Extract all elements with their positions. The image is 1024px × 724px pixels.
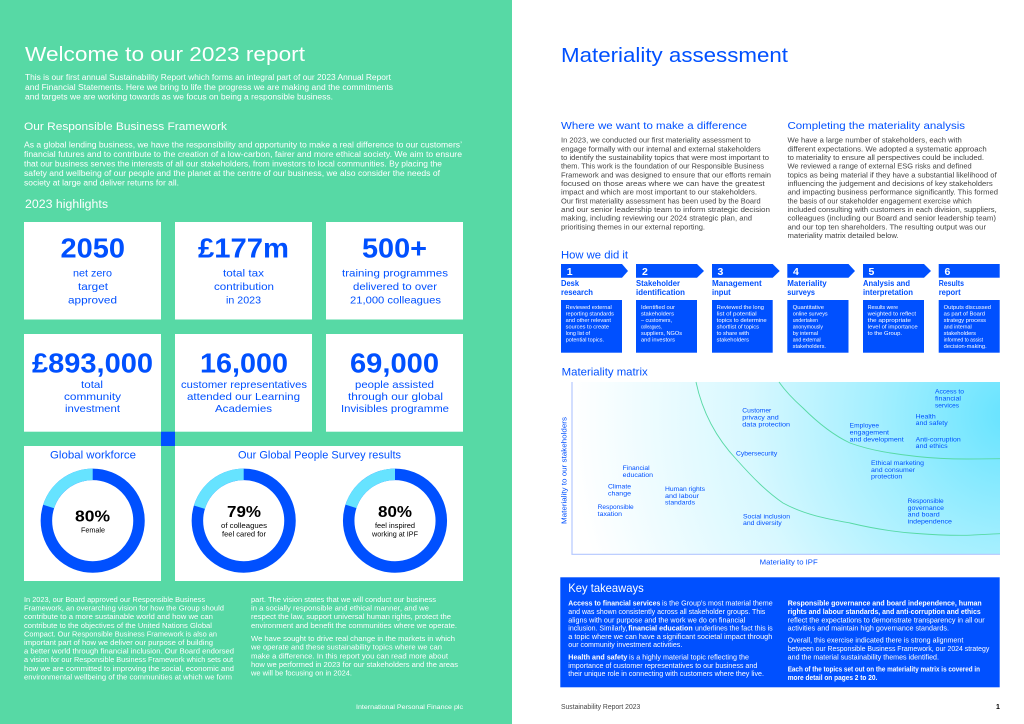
text block: takeaways right: reflect the expectations to demonstrate transparency in all our <box>788 617 985 624</box>
matrix labels: high materiality: services <box>935 403 960 410</box>
step 4: materiality surveys: undertaken <box>793 318 818 324</box>
matrix labels: medium materiality: data protection <box>742 421 790 428</box>
matrix labels: lower materiality <box>598 465 706 518</box>
text block: where we want to make a difference <box>561 138 771 231</box>
text block: completing the materiality analysis <box>788 138 998 240</box>
matrix labels: medium materiality: protection <box>871 474 903 481</box>
step 4: materiality surveys: stakeholders. <box>793 344 826 350</box>
panel: right white page <box>512 0 1024 724</box>
text block: takeaways right: Each of the topics set out on the materiality matrix is covered in <box>788 667 980 674</box>
card: total tax contribution: £177m <box>198 233 289 264</box>
step 6: results report: Results <box>939 279 964 288</box>
text block: where we want to make a difference: making, including reviewing our 2024 strategic plan, and <box>561 216 752 223</box>
matrix labels: medium materiality: and diversity <box>743 520 782 527</box>
text block: completing the materiality analysis: influencing the judgement and decisions of key stakeholders <box>788 181 993 188</box>
card: 2050 net zero target: target <box>78 281 108 293</box>
donut: 80% feel inspired: feel inspired <box>375 523 415 530</box>
step 1: desk research <box>561 264 628 353</box>
step 4: materiality surveys: Quantitative <box>793 305 824 311</box>
text block: takeaways left: Health and safety <box>568 654 627 662</box>
text block: takeaways left: their unique role in connecting with customers where they live. <box>568 671 764 678</box>
step 4: materiality surveys: by internal <box>793 331 818 337</box>
text block: framework description: safety and wellbeing of our people and the planet at the centre of our business, we also consider the needs of <box>24 169 441 178</box>
matrix labels: medium materiality: and consumer <box>871 467 916 474</box>
panel: global workforce <box>24 446 161 581</box>
step 1: desk research: sources to create <box>566 324 609 330</box>
heading: key takeaways: Key takeaways <box>568 581 644 595</box>
chart: materiality matrix <box>561 382 1000 567</box>
curve: upper materiality threshold <box>779 382 1000 459</box>
matrix labels: lower materiality: change <box>608 490 631 498</box>
text block: board approval column 1: contribute to a more sustainable world and how we can <box>24 614 213 621</box>
text block: board approval column 2: respect the law, support universal human rights, protect the <box>251 614 451 621</box>
matrix labels: lower materiality: taxation <box>598 511 622 518</box>
matrix labels: lower materiality: standards <box>665 500 696 507</box>
text block: board approval column 2 <box>250 597 459 678</box>
step 6: results report <box>939 264 1000 353</box>
card: 2050 net zero target: 2050 <box>60 233 125 264</box>
text block: takeaways left: importance of customer representatives to our business and <box>568 663 757 670</box>
text block: takeaways right <box>788 601 990 682</box>
text block: board approval column 1: Framework, an overarching vision for how the Group should <box>24 606 224 613</box>
step 3: management input: shortlist of topics <box>717 324 759 330</box>
step 3: management input: input <box>712 288 731 297</box>
text block: takeaways left: inclusion. Similarly, <box>568 626 627 633</box>
step 1: desk research: reporting standards <box>566 312 614 318</box>
text block: introduction: and targets we are working towards as we focus on being a responsible business. <box>25 93 333 102</box>
text block: framework description: society at large and deliver returns for all. <box>24 178 179 188</box>
panel: global workforce: Global workforce <box>50 450 136 462</box>
matrix labels: high materiality: and safety <box>916 420 948 427</box>
text block: introduction <box>25 73 393 102</box>
donut: 79% feel cared for <box>197 474 290 567</box>
donut: 80% feel inspired: 80% <box>378 504 412 521</box>
text block: takeaways left: financial education <box>628 626 693 633</box>
step 4: materiality surveys: online surveys <box>793 312 828 318</box>
footer: company name: International Personal Finance plc <box>356 704 464 711</box>
heading: how we did it: How we did it <box>561 249 628 261</box>
text block: where we want to make a difference: and our senior leadership team to inform strategic decision <box>561 207 770 214</box>
heading: where we want to make a difference: Where we want to make a difference <box>561 120 747 132</box>
curve: lower materiality threshold <box>696 382 1000 535</box>
step 6: results report: informed to assist <box>944 337 983 343</box>
matrix labels: high materiality <box>850 389 964 450</box>
matrix labels: medium materiality: Social inclusion <box>743 513 790 520</box>
matrix labels: medium materiality: and board <box>908 512 940 519</box>
step 5: analysis and interpretation <box>863 264 931 353</box>
donut: 80% female: 80% <box>75 509 110 526</box>
matrix labels: high materiality: and ethics <box>916 443 948 450</box>
step 1: desk research: research <box>561 288 593 297</box>
card: customer representatives: customer representatives <box>181 379 307 391</box>
text block: completing the materiality analysis: topics as being material if they have a substantial likelihood of <box>788 172 997 179</box>
matrix labels: high materiality: Health <box>916 413 936 420</box>
text block: where we want to make a difference: impact and which are most important to our stakeholders. <box>561 190 757 197</box>
step 5: analysis and interpretation: Results were <box>868 305 898 311</box>
text block: board approval column 1: environmental wellbeing of the communities at which we form <box>24 674 232 681</box>
card: 2050 net zero target <box>24 222 161 320</box>
decorative blue square <box>161 432 175 446</box>
matrix labels: high materiality: and development <box>850 436 904 443</box>
card: training programmes <box>326 222 463 320</box>
text block: takeaways right: more detail on pages 2 to 20. <box>788 675 877 682</box>
matrix labels: high materiality: Anti-corruption <box>916 436 961 443</box>
text block: completing the materiality analysis: colleagues (including our Board and senior leadership team) <box>788 216 996 223</box>
text block: board approval column 2: we operate and these sustainability topics where we can <box>250 645 442 652</box>
text block: introduction: This is our first annual Sustainability Report which forms an integral part of our 2023 Annual Report <box>25 73 392 82</box>
matrix labels: lower materiality: Responsible <box>598 504 634 511</box>
text block: completing the materiality analysis: different expectations. We adopted a systematic approach <box>788 146 987 153</box>
text block: where we want to make a difference: to identify the sustainability topics that were most important to <box>561 155 769 162</box>
step 2: stakeholder identification: 2 <box>642 266 648 278</box>
step 6: results report: decision-making. <box>944 344 987 350</box>
matrix labels: lower materiality: education <box>623 472 653 479</box>
step 5: analysis and interpretation: the appropriate <box>868 318 911 324</box>
step 3: management input: list of potential <box>717 312 757 318</box>
step 1: desk research: Desk <box>561 279 580 288</box>
text block: where we want to make a difference: prioritising themes in our external reporting. <box>561 224 705 231</box>
step 4: materiality surveys: and external <box>793 337 821 343</box>
card: customer representatives: 16,000 <box>200 348 288 379</box>
step 6: results report: 6 <box>944 266 950 278</box>
step 1: desk research: long list of <box>566 331 590 337</box>
card: people assisted: through our global <box>348 391 443 403</box>
step 2: stakeholder identification: and investors <box>641 337 675 343</box>
text block: where we want to make a difference: In 2023, we conducted our first materiality assessment to <box>561 138 751 145</box>
card: people assisted: people assisted <box>355 379 434 391</box>
heading: responsible business framework: Our Responsible Business Framework <box>24 121 228 133</box>
text block: takeaways right: Overall, this exercise indicated there is strong alignment <box>788 638 963 645</box>
card: training programmes: delivered to over <box>353 281 438 293</box>
card: people assisted: 69,000 <box>350 348 439 379</box>
text block: takeaways right: activities and maintain high governance standards. <box>788 626 949 633</box>
step 2: stakeholder identification: – customers, <box>641 318 672 324</box>
text block: completing the materiality analysis: included consulting with customers in each division, suppliers, <box>788 207 997 214</box>
step 6: results report: Outputs discussed <box>944 305 991 311</box>
matrix labels: medium materiality: Ethical marketing <box>871 460 924 467</box>
step 3: management input: to share with <box>717 331 749 337</box>
card: community investment: investment <box>65 403 120 415</box>
matrix labels: medium materiality: Customer <box>742 408 772 415</box>
text block: where we want to make a difference: them. This work is the foundation of our Responsible Business <box>561 164 765 171</box>
card: people assisted <box>326 334 463 432</box>
step 4: materiality surveys: Materiality <box>787 279 827 288</box>
step 1: desk research: Reviewed external <box>566 305 612 311</box>
heading: 2023 highlights: 2023 highlights <box>25 199 108 211</box>
donut: 79% feel cared for: feel cared for <box>222 532 267 539</box>
text block: board approval column 2: make a difference. In this report you can read more about <box>251 653 448 660</box>
step 5: analysis and interpretation: to the Group. <box>868 331 902 337</box>
title: welcome: Welcome to our 2023 report <box>25 43 305 66</box>
step 6: results report: as part of Board <box>944 312 985 318</box>
step 6: results report: report <box>939 288 961 297</box>
card: 2050 net zero target: approved <box>68 295 117 307</box>
step 1: desk research: 1 <box>567 266 573 278</box>
donut: 80% female <box>46 474 139 567</box>
text block: board approval column 2: We have sought to drive real change in the markets in which <box>251 636 455 643</box>
matrix labels: medium materiality: privacy and <box>742 414 779 422</box>
card: total tax contribution: in 2023 <box>226 295 261 307</box>
donut: 80% feel inspired: working at IPF <box>371 532 418 539</box>
text block: board approval column 2: how we performed in 2023 for our stakeholders and the areas <box>251 662 459 669</box>
text block: board approval column 2: in a socially responsible and ethical manner, and we <box>251 606 429 613</box>
text block: takeaways left <box>568 601 773 678</box>
step 6: results report: stakeholders <box>944 331 976 337</box>
text block: takeaways right: and the material sustainability themes identified. <box>788 654 939 661</box>
step 3: management input: stakeholders <box>717 337 749 343</box>
step 4: materiality surveys <box>787 264 855 353</box>
footer: page number: 1 <box>996 704 1000 711</box>
card: training programmes: 500+ <box>362 233 427 264</box>
card: total tax contribution: contribution <box>214 281 274 293</box>
step 4: materiality surveys: surveys <box>787 288 816 297</box>
step 3: management input: Management <box>712 279 762 288</box>
matrix labels: lower materiality: Financial <box>623 465 650 472</box>
text block: completing the materiality analysis: We reviewed a range of external ESG risks and defined <box>788 164 972 171</box>
text block: takeaways left: is the Group’s most material theme <box>662 601 773 608</box>
card: training programmes: 21,000 colleagues <box>350 295 441 307</box>
step 6: results report: and internal <box>944 324 972 330</box>
card: customer representatives: Academies <box>215 403 272 415</box>
text block: completing the materiality analysis: the basis of our stakeholder engagement exercise which <box>788 198 972 205</box>
text block: framework description <box>24 140 463 188</box>
matrix labels: high materiality: financial <box>935 396 962 403</box>
step 4: materiality surveys: 4 <box>793 266 799 278</box>
heading: materiality matrix: Materiality matrix <box>562 366 648 378</box>
panel: global people survey results: Our Global People Survey results <box>238 450 401 462</box>
text block: completing the materiality analysis: We have a large number of stakeholders, each with <box>788 138 962 145</box>
text block: board approval column 1: contribute to the objectives of the United Nations Global <box>24 623 212 630</box>
step 1: desk research: and other relevant <box>566 318 611 324</box>
text block: board approval column 1: a better world through financial inclusion. Our Board endorsed <box>24 649 234 656</box>
text block: takeaways left: and was shown consistently across all stakeholder groups. This <box>568 609 766 616</box>
panel: key takeaways <box>560 577 1000 687</box>
text block: framework description: financial futures and to contribute to the creation of a low-carbon, fairer and more ethical society. We aim to ensure <box>24 150 463 159</box>
card: 2050 net zero target: net zero <box>73 267 112 279</box>
step 1: desk research: potential topics. <box>566 337 604 343</box>
donut: 79% feel cared for: 79% <box>227 504 261 521</box>
card: customer representatives: attended our Learning <box>187 391 300 403</box>
text block: board approval column 1: Compact. Our Responsible Business Framework is also an <box>24 631 217 638</box>
text block: completing the materiality analysis: materiality matrix detailed below. <box>788 233 899 240</box>
text block: where we want to make a difference: Our first materiality assessment has been used by the Board <box>561 198 761 205</box>
text block: board approval column 1: how we are committed to improving the social, economic and <box>24 666 234 673</box>
step 2: stakeholder identification <box>636 264 704 353</box>
matrix labels: lower materiality: and labour <box>665 493 700 500</box>
footer: report name: Sustainability Report 2023 <box>561 704 640 711</box>
matrix labels: high materiality: Employee <box>850 423 879 430</box>
text block: completing the materiality analysis: to materiality to ensure all perspectives could be included. <box>788 155 984 162</box>
text block: takeaways right: Responsible governance and board independence, human <box>788 601 982 608</box>
step 3: management input: topics to determine <box>717 318 767 324</box>
step 2: stakeholder identification: suppliers, NGOs <box>641 331 682 337</box>
text block: framework description: that our business serves the interests of all our stakeholders, from investors to local communities. By placing the <box>24 160 443 168</box>
text block: takeaways left: Access to financial services <box>568 601 660 608</box>
text block: takeaways right: between our Responsible Business Framework, our 2024 strategy <box>788 646 990 653</box>
text block: takeaways left: is a highly material topic reflecting the <box>629 654 749 662</box>
step 3: management input: Reviewed the long <box>717 305 764 311</box>
step 6: results report: strategy process <box>944 318 986 324</box>
step 5: analysis and interpretation: weighted to reflect <box>867 312 917 318</box>
text block: board approval column 2: we will be focusing on in 2024. <box>250 671 352 678</box>
matrix labels: lower materiality: Human rights <box>665 486 706 493</box>
text block: board approval column 1: a vision for our Responsible Business Framework which sets out <box>24 657 233 664</box>
step 5: analysis and interpretation: interpretation <box>863 288 913 297</box>
step 5: analysis and interpretation: level of importance <box>868 324 918 330</box>
text block: takeaways left: aligns with our purpose and the work we do on financial <box>568 617 746 624</box>
text block: board approval column 1: important part of how we deliver our purpose of building <box>24 640 213 647</box>
matrix labels: high materiality: engagement <box>850 430 889 436</box>
text block: board approval column 2: environment and benefit the communities where we operate. <box>251 623 457 630</box>
title: materiality assessment: Materiality assessment <box>561 44 788 67</box>
matrix labels: medium materiality: independence <box>908 518 952 525</box>
matrix labels: lower materiality: Climate <box>608 483 631 490</box>
step 2: stakeholder identification: Identified our <box>641 305 675 311</box>
axis label: y: Materiality to our stakeholders <box>561 416 568 524</box>
text block: introduction: and Financial Statements. Here we bring to life the progress we are making and the commitments <box>25 83 393 92</box>
matrix labels: high materiality: Access to <box>935 389 964 396</box>
text block: where we want to make a difference: engage formally with our internal and external stakeholders <box>561 146 761 153</box>
matrix labels: medium materiality: Responsible <box>908 498 944 505</box>
text block: takeaways left: underlines the fact this is <box>695 626 773 633</box>
card: total tax contribution <box>175 222 312 320</box>
card: training programmes: training programmes <box>342 267 448 279</box>
text block: takeaways right: rights and labour standards, and anti-corruption and ethics <box>788 609 981 616</box>
text block: completing the materiality analysis: and our top ten shareholders. The resulting output was our <box>788 224 987 231</box>
step 5: analysis and interpretation: Analysis and <box>863 279 910 288</box>
step 4: materiality surveys: anonymously <box>793 324 823 330</box>
card: community investment: community <box>64 391 122 403</box>
matrix labels: medium materiality: Cybersecurity <box>736 451 778 458</box>
text block: board approval column 1: In 2023, our Board approved our Responsible Business <box>24 597 206 604</box>
text block: where we want to make a difference: Framework and was designed to ensure that our efforts remain <box>561 172 771 179</box>
matrix labels: medium materiality <box>736 408 952 527</box>
step 2: stakeholder identification: Stakeholder <box>636 279 680 288</box>
donut: 79% feel cared for: of colleagues <box>221 523 268 530</box>
card: community investment: £893,000 <box>32 348 153 379</box>
panel: left green page <box>0 0 512 724</box>
text block: where we want to make a difference: focused on those areas where we can have the greatest <box>561 181 765 188</box>
donut: 80% female: Female <box>81 528 105 535</box>
text block: completing the materiality analysis: and impacting business performance significantly. This formed <box>788 190 998 197</box>
donut: 80% feel inspired <box>349 474 441 567</box>
step 5: analysis and interpretation: 5 <box>868 266 874 278</box>
card: total tax contribution: total tax <box>223 267 265 279</box>
step 2: stakeholder identification: identification <box>636 288 685 297</box>
text block: takeaways left: our community investment activities. <box>568 642 682 649</box>
step 3: management input <box>712 264 780 353</box>
card: people assisted: Invisibles programme <box>341 403 449 415</box>
text block: board approval column 2: part. The vision states that we will conduct our business <box>251 597 437 604</box>
axis label: x: Materiality to IPF <box>760 560 818 567</box>
card: community investment: total <box>81 379 103 391</box>
card: community investment <box>24 334 161 432</box>
text block: framework description: As a global lending business, we have the responsibility and opportunity to make a real difference to our customers’ <box>24 140 462 149</box>
step 2: stakeholder identification: stakeholders <box>641 312 674 318</box>
text block: takeaways left: a topic where we can have a significant societal impact through <box>568 634 772 641</box>
matrix labels: medium materiality: governance <box>908 505 944 512</box>
heading: completing the materiality analysis: Completing the materiality analysis <box>788 120 965 132</box>
card: customer representatives <box>175 334 312 432</box>
step 3: management input: 3 <box>718 266 724 278</box>
step 2: stakeholder identification: colleagues, <box>641 324 662 330</box>
text block: board approval column 1 <box>24 597 234 681</box>
panel: global people survey results <box>175 446 463 581</box>
